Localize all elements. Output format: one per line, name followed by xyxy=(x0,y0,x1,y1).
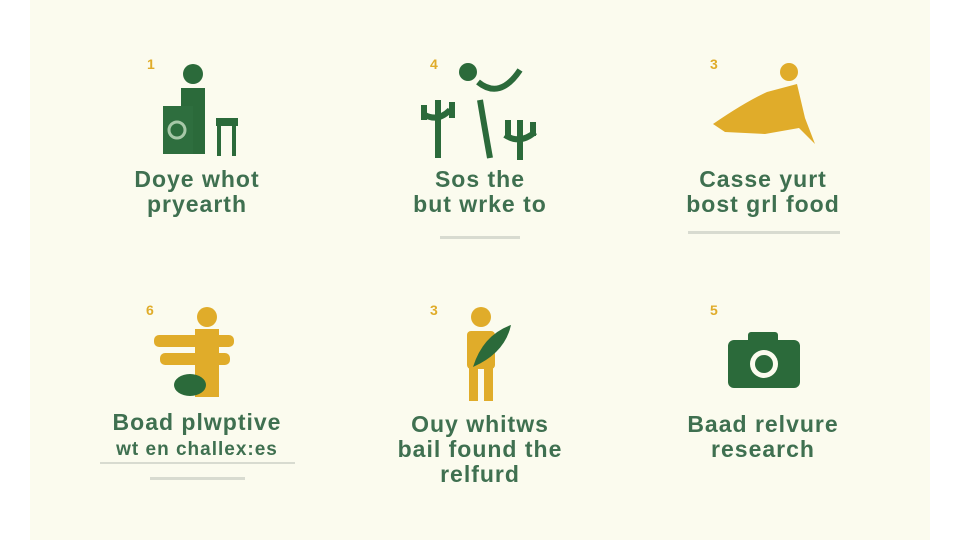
text 5: Ouy whitws xyxy=(411,411,549,437)
icon: person with boxes and shrub xyxy=(154,307,234,397)
icon: person with washing machine xyxy=(163,64,238,156)
text 4: Boad plwptive xyxy=(113,409,281,435)
icon: reclining figure xyxy=(713,63,815,144)
number 3: 3 xyxy=(710,56,718,72)
number 1: 1 xyxy=(147,56,155,72)
text 1: pryearth xyxy=(147,191,247,217)
text 1: Doye whot xyxy=(134,166,260,192)
text 2: but wrke to xyxy=(413,191,547,217)
placeholder line xyxy=(688,231,840,234)
text 6: Baad relvure xyxy=(687,411,839,437)
number 3: 3 xyxy=(430,302,438,318)
text 6 xyxy=(687,411,839,462)
text 6: research xyxy=(711,436,815,462)
text 4 xyxy=(113,409,281,460)
number 5: 5 xyxy=(710,302,718,318)
placeholder lines xyxy=(100,462,295,464)
number 6: 6 xyxy=(146,302,154,318)
text 3: Casse yurt xyxy=(699,166,827,192)
placeholder line xyxy=(440,236,520,239)
text 2 xyxy=(413,166,547,217)
text 5 xyxy=(398,411,562,487)
text 4: wt en challex:es xyxy=(116,439,278,460)
text 1 xyxy=(134,166,260,217)
icon: plants xyxy=(421,63,537,160)
text 2: Sos the xyxy=(435,166,525,192)
text 5: relfurd xyxy=(440,461,520,487)
number 4: 4 xyxy=(430,56,438,72)
text 3 xyxy=(686,166,840,217)
text 3: bost grl food xyxy=(686,191,840,217)
text 5: bail found the xyxy=(398,436,562,462)
icon: camera xyxy=(728,332,800,388)
icon: person with leaf xyxy=(467,307,511,401)
